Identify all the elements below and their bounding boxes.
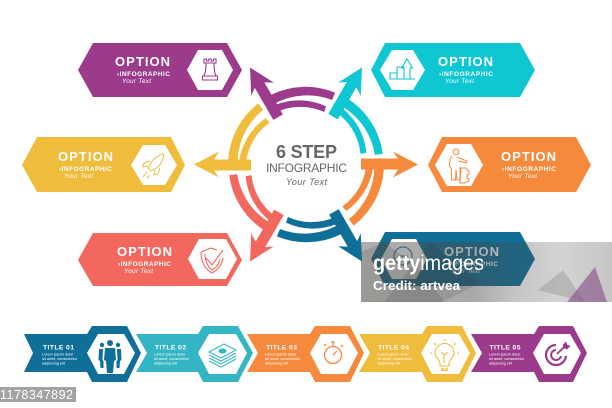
heading: option coral: OPTION [117, 244, 172, 259]
text: your text teal: Your Text [445, 78, 475, 85]
heading: title 01: TITLE 01 [43, 344, 74, 352]
step: title 01 [24, 326, 141, 382]
text: lorem 05: adipiscing elit [489, 362, 513, 366]
icon: people [98, 340, 122, 373]
step: title 04 [359, 326, 476, 382]
step: title 03 [247, 326, 364, 382]
text: lorem 03: Lorem ipsum dolor [265, 352, 297, 356]
text: lorem 01: adipiscing elit [42, 362, 66, 366]
panel: option coral [78, 233, 242, 286]
text: lorem 02: Lorem ipsum dolor [154, 352, 186, 356]
text: lorem 01: Lorem ipsum dolor [42, 352, 74, 356]
text: lorem 04: Lorem ipsum dolor [378, 352, 410, 356]
heading: option yellow: OPTION [58, 149, 113, 164]
text: your text yellow: Your Text [64, 173, 94, 180]
icon: light bulb [430, 339, 459, 370]
text: infographic blue: ›INFOGRAPHIC [445, 261, 498, 268]
panel: option teal [371, 43, 535, 97]
text: lorem 03: adipiscing elit [265, 362, 289, 366]
text: your text purple: Your Text [122, 78, 152, 85]
heading: title 02: TITLE 02 [155, 344, 186, 352]
panel: option orange [428, 137, 591, 192]
step: title 05 [471, 326, 587, 382]
text: lorem 04: adipiscing elit [378, 362, 401, 366]
panel: option yellow [22, 137, 185, 192]
heading: option blue: OPTION [444, 244, 499, 259]
arrow: yellow step [194, 103, 270, 178]
text: infographic coral: ›INFOGRAPHIC [118, 261, 171, 268]
icon: man with gear [450, 149, 469, 183]
heading: option purple: OPTION [115, 54, 170, 69]
text: lorem 01 [42, 352, 78, 366]
text: lorem 02 [154, 352, 190, 366]
heading: 6 step: 6 STEP [276, 142, 337, 162]
icon: rocket [143, 154, 164, 178]
panel: option purple [78, 43, 242, 97]
text: infographic purple: ›INFOGRAPHIC [117, 71, 170, 78]
text: credit: Credit: artvea [373, 278, 461, 293]
step: title 02 [136, 326, 253, 382]
text: your text blue: Your Text [451, 268, 481, 275]
text: lorem 05 [489, 352, 525, 366]
text: lorem 03 [265, 352, 301, 366]
icon: money stack [209, 344, 236, 367]
icon: growth chart [389, 59, 415, 79]
text: lorem 03: sit amet, consectetur [265, 357, 301, 361]
text: infographic teal: ›INFOGRAPHIC [439, 71, 493, 78]
arrow: purple step [239, 37, 341, 139]
text: lorem 02: sit amet, consectetur [154, 357, 190, 361]
arrow: blue step [271, 190, 373, 292]
text: lorem 02: adipiscing elit [154, 362, 178, 366]
arrow: teal step [313, 61, 415, 164]
arrow: orange step [342, 152, 418, 226]
text: lorem 05: sit amet, consectetur [489, 357, 525, 361]
icon: chat bubble [394, 247, 412, 265]
text: lorem 01: sit amet, consectetur [42, 357, 78, 361]
text: your text orange: Your Text [508, 173, 538, 180]
text: lorem 04: sit amet, consectetur [378, 357, 413, 361]
text: infographic orange: ›INFOGRAPHIC [502, 166, 556, 173]
label: image id: 1178347892 [0, 388, 73, 402]
icon: shield check [201, 248, 223, 273]
heading: title 05: TITLE 05 [490, 344, 521, 352]
title: 6 step infographic [266, 142, 347, 187]
arrow: coral step [197, 165, 299, 268]
heading: title 04: TITLE 04 [378, 344, 409, 352]
heading: option orange: OPTION [501, 149, 556, 164]
text: lorem 04 [378, 352, 413, 366]
icon: stopwatch [324, 342, 343, 364]
heading: title 03: TITLE 03 [266, 344, 297, 352]
text: your text coral: Your Text [124, 268, 154, 275]
panel: option blue [371, 232, 535, 286]
text: your text: Your Text [286, 177, 327, 187]
text: infographic yellow: ›INFOGRAPHIC [59, 166, 112, 173]
icon: chess rook [202, 59, 218, 80]
watermark: getty images overlay [361, 242, 612, 302]
text: getty images: gettyimages [373, 252, 484, 275]
heading: option teal: OPTION [438, 54, 493, 69]
text: lorem 05: Lorem ipsum dolor [489, 352, 521, 356]
icon: target [546, 342, 570, 365]
text: infographic: INFOGRAPHIC [266, 161, 347, 175]
